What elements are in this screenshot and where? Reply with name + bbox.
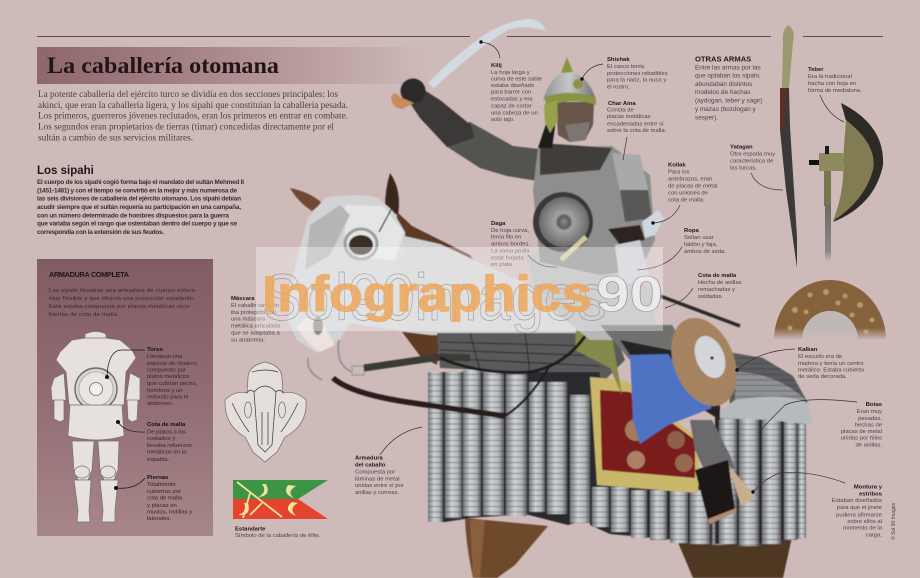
label: Ropa xyxy=(684,228,726,255)
callout: Cota de malla panel xyxy=(116,420,192,463)
text: Los sipahi body: (1451-1481) y con el tiempo se convirtió en la mejor y más numerosa de xyxy=(37,187,237,194)
callout lines xyxy=(380,42,857,492)
label: Kilij: La hoja larga y xyxy=(491,70,530,76)
label: Cota de malla: Hecha de anillas xyxy=(698,280,742,286)
label: Kilij: capaz de cortar xyxy=(491,104,532,110)
callout: Piernas: muslos, rodillas y xyxy=(147,510,192,516)
callout: Piernas: cota de malla xyxy=(147,496,183,502)
text: Los sipahi body: correspondía con la extensión de sus feudos. xyxy=(37,229,164,236)
rider head and helmet xyxy=(538,57,596,148)
label: Montura y estribos: carga. xyxy=(866,532,882,538)
heading: Los sipahi: Los sipahi xyxy=(37,165,94,177)
illustration: full armour figure xyxy=(51,332,140,522)
panel paragraph: Esta estaba compuesta por placas metálicas recu- xyxy=(49,304,191,310)
label: Shishak: para la nariz, la nuca y xyxy=(607,78,666,84)
label: Kilij: curva de este sable xyxy=(491,76,543,82)
label: Botas: de anillas. xyxy=(855,443,882,449)
watermark: Sol90images xyxy=(262,260,607,334)
label: Daga xyxy=(491,221,530,268)
label: Montura y estribos: pudiera afirmarse xyxy=(836,512,883,518)
label: Estandarte: Símbolo de la caballería de élite. xyxy=(235,533,321,539)
label: Montura y estribos xyxy=(832,484,883,538)
label: Kollak: de placas de metal xyxy=(668,183,717,189)
callout: Piernas: cubiertas por xyxy=(147,489,181,495)
blue cloth xyxy=(630,354,712,444)
label: Kalkan: Kalkan xyxy=(798,347,818,353)
label: Armadura del caballo xyxy=(355,456,404,496)
label: Máscara: que se adaptaba a xyxy=(231,331,281,337)
callout: Torso xyxy=(105,347,198,407)
label: Máscara xyxy=(231,296,281,343)
watermark: 90 xyxy=(596,266,663,322)
label: Daga: De hoja curva, xyxy=(491,228,529,234)
label: Char Aina: Char Aina xyxy=(608,101,636,107)
rider torso xyxy=(533,143,664,285)
label: Máscara: su anatomía. xyxy=(231,337,265,343)
title banner: La caballería otomana xyxy=(47,53,280,78)
title banner xyxy=(37,47,430,84)
label: Máscara: metálica articulada xyxy=(231,323,281,329)
callout: Torso: compuesto por xyxy=(147,368,186,374)
rider leg and boot xyxy=(690,420,736,524)
label: Cota de malla: soldadas. xyxy=(698,294,724,300)
label: Botas: Botas xyxy=(866,402,883,408)
label: Yatagan: Yatagan xyxy=(730,145,753,151)
callout: Torso: Llevaban una xyxy=(147,354,183,360)
label: Ropa: faldón y faja, xyxy=(684,242,718,248)
text: Los sipahi body: que variaba según el rango que ostentaban dentro del cuerpo y que se xyxy=(37,221,237,228)
callout dots xyxy=(479,40,755,494)
callout: Piernas: Piernas xyxy=(147,475,169,481)
callout: Piernas: laterales. xyxy=(147,516,171,522)
label: Montura y estribos: Montura y xyxy=(854,484,883,490)
flag: estandarte xyxy=(233,480,328,519)
label: Char Aina: sobre la cota de malla. xyxy=(607,128,667,134)
yatagan sword xyxy=(780,25,797,268)
label: Kilij: solo tajo. xyxy=(491,117,515,123)
block: Otras armas: abundaban distintos xyxy=(695,81,752,88)
intro paragraph: akinci, que eran la caballería ligera, y los sipahi que constituían la caballería pesada. xyxy=(38,100,348,111)
block: Otras armas: modelos de hachas xyxy=(695,89,750,96)
callout: Piernas: Totalmente xyxy=(147,482,177,488)
callout: Torso: hombros y un xyxy=(147,388,183,394)
callout: Cota de malla panel: llevaba refuerzos xyxy=(147,443,192,449)
label: Montura y estribos: para que el jinete xyxy=(837,505,883,511)
label: Botas: placas de metal xyxy=(841,429,882,435)
callout: Torso: que cubrían pecho, xyxy=(147,381,198,387)
callout: Torso: especie de chaleco xyxy=(147,361,198,367)
callout: Cota de malla panel: costados y xyxy=(147,436,175,442)
label: Char Aina: encadenadas entre sí xyxy=(607,121,664,127)
label: Armadura del caballo: láminas de metal xyxy=(355,476,400,482)
label: Kilij: una cabeza de un xyxy=(491,110,538,116)
label: Teber: Teber xyxy=(808,67,824,73)
horse neck armour xyxy=(392,236,602,338)
callout: Torso: abdomen. xyxy=(147,401,174,407)
horse rump cape xyxy=(716,352,813,425)
shield kalkan xyxy=(659,308,749,416)
label: Kollak: Para los xyxy=(668,169,690,175)
block: Otras armas: y mazas (bozdogan y xyxy=(695,106,757,113)
credit: © Sol 90 Images xyxy=(890,502,897,540)
label: Kalkan xyxy=(798,347,865,380)
label: Kilij: estocadas y era xyxy=(491,97,533,103)
label: Yatagan: Otra espada muy xyxy=(730,152,775,158)
label: Máscara: una máscara xyxy=(231,317,266,323)
block: Otras armas xyxy=(695,54,762,122)
label: Montura y estribos: Estaban diseñados xyxy=(832,498,882,504)
label: Char Aina xyxy=(607,101,667,134)
callout: Piernas xyxy=(114,475,192,522)
text: Los sipahi body: con un número determinado de hombres dispuestos para la guerra xyxy=(37,212,229,219)
label: Kalkan: El escudo era de xyxy=(798,354,843,360)
label: Kollak: antebrazos, eran xyxy=(668,176,712,182)
label: Montura y estribos: momento de la xyxy=(843,526,883,532)
callout: Cota de malla panel: De platos a los xyxy=(147,430,186,436)
callout: Torso: Torso xyxy=(147,347,163,353)
text: Los sipahi body: acudir siempre que el sultán requería su participación en una campaña, xyxy=(37,204,241,211)
saddle cloth xyxy=(590,377,700,493)
label: Kalkan: madera y tenía un centro xyxy=(798,361,864,367)
sword: kilij xyxy=(428,19,546,88)
callout: Piernas: y placas en xyxy=(147,503,177,509)
callout: Torso: platos metálicos xyxy=(147,374,189,380)
panel heading: ARMADURA COMPLETA xyxy=(49,270,130,279)
label: Máscara: El caballo también xyxy=(231,303,279,309)
saddle front xyxy=(575,325,622,395)
label: Char Aina: placas metálicas xyxy=(607,114,651,120)
label: Cota de malla: remachadas y xyxy=(698,287,735,293)
label: Teber: hacha con hoja en xyxy=(808,81,856,87)
label: Armadura del caballo: del caballo xyxy=(355,462,386,468)
shield detail xyxy=(774,280,886,340)
panel paragraph: Los sipahi llevaban una armadura de cuerpo entero xyxy=(49,288,196,294)
label: Kollak: con uniones de xyxy=(668,190,709,196)
label: Kilij xyxy=(491,63,543,123)
text: Los sipahi body: El cuerpo de los sipahi cogió forma bajo el mandato del sultán Mehmed II xyxy=(37,179,244,186)
label: Montura y estribos: estribos xyxy=(859,491,883,497)
label: Shishak xyxy=(607,57,668,91)
block: Otras armas: Entre las armas por las xyxy=(695,64,761,72)
block: Otras armas: que optaban los sipahi, xyxy=(695,72,761,80)
label: Daga: Daga xyxy=(491,221,506,227)
horse body armour: left section xyxy=(425,368,600,526)
panel paragraph: biertas de cota de malla. xyxy=(49,312,119,318)
axe teber xyxy=(809,103,883,262)
label: Montura y estribos: sobre ellos al xyxy=(847,519,882,525)
label: Teber: forma de medialuna. xyxy=(808,88,862,94)
label: Botas: hechas de xyxy=(855,422,883,428)
label: Char Aina: Consta de xyxy=(607,107,635,113)
label: Kilij: para barrer con xyxy=(491,90,531,96)
block: Otras armas: (aydogan, teber y sagir) xyxy=(695,98,762,104)
label: Ropa: Solían usar xyxy=(684,235,714,241)
label: Armadura del caballo: unidas entre sí por xyxy=(355,483,404,489)
intro paragraph: Los segundos eran propietarios de tierras (timar) concedidas directamente por el xyxy=(38,122,334,132)
horse body armour: lower section xyxy=(590,485,730,546)
label: Shishak: Shishak xyxy=(607,57,630,63)
bridle and straps xyxy=(308,208,592,416)
label: Máscara: Máscara xyxy=(231,296,255,302)
intro paragraph xyxy=(38,89,348,144)
watermark: Infographics xyxy=(262,266,592,322)
label: Máscara: iba protegido con xyxy=(231,310,276,316)
label: Yatagan: característica de xyxy=(730,159,774,165)
intro paragraph: Los primeros, guerreros jóvenes reclutados, eran los primeros en entrar en combate. xyxy=(38,110,348,122)
label: Estandarte xyxy=(235,526,321,539)
label: Teber xyxy=(808,67,862,94)
callout: Cota de malla panel: espalda. xyxy=(147,457,170,463)
label: Yatagan: las turcas. xyxy=(730,166,757,172)
label: Armadura del caballo: Compuesta por xyxy=(355,469,395,475)
callout: Cota de malla panel: Cota de malla xyxy=(147,422,186,428)
label: Cota de malla: Cota de malla xyxy=(698,273,737,279)
label: Kollak xyxy=(668,162,717,203)
label: Kilij: Kilij xyxy=(491,63,502,69)
label: Botas: unidas por hilos xyxy=(841,436,882,442)
label: Daga: en plata. xyxy=(491,262,514,268)
scabbard xyxy=(660,296,740,326)
label: Kalkan: metálico. Estaba cubierto xyxy=(798,368,865,374)
illustration: horse mask xyxy=(225,362,306,462)
label: Estandarte: Estandarte xyxy=(235,526,266,532)
label: Ropa: ambos de seda. xyxy=(684,249,726,255)
rider left arm xyxy=(391,78,556,184)
label: Shishak: el rostro. xyxy=(607,85,630,91)
label: Botas xyxy=(841,402,883,449)
panel: armadura completa xyxy=(37,259,213,536)
label: Armadura del caballo: anillas y correas. xyxy=(355,490,400,496)
panel paragraph: muy flexible y que ofrecía una protección excelente. xyxy=(49,296,195,302)
label: Kilij: estaba diseñado xyxy=(491,83,535,89)
label: Daga: La vaina podía xyxy=(491,249,530,255)
label: Kollak: cota de malla. xyxy=(668,197,705,203)
horse mane and brown chest xyxy=(397,212,480,365)
horse body armour: rear section xyxy=(715,415,807,546)
label: Botas: pesadas, xyxy=(858,416,882,422)
label: Teber: Era la tradicional xyxy=(808,74,852,80)
text: Los sipahi body xyxy=(37,179,244,236)
block: Otras armas: sesper). xyxy=(695,114,718,122)
horse and rider illustration xyxy=(288,19,813,578)
label: Daga: estar forjada xyxy=(491,255,524,261)
callout: Torso: redondo para el xyxy=(147,394,188,400)
horse legs xyxy=(465,518,792,578)
horse chest plates xyxy=(437,333,625,385)
horse head mask xyxy=(288,173,405,353)
text: Los sipahi body: las seis divisiones de caballería del ejército otomano. Los sipahi debían xyxy=(37,196,241,203)
callout: Cota de malla panel: metálicos en la xyxy=(147,450,187,456)
top rule lines xyxy=(37,36,883,38)
label: Ropa: Ropa xyxy=(684,228,699,234)
label: Shishak: El casco tenía xyxy=(607,64,645,70)
label: Shishak: protecciones rebatibles xyxy=(607,71,668,77)
block: Otras armas: OTRAS ARMAS xyxy=(695,54,751,64)
label: Kalkan: de seda decorada. xyxy=(798,374,847,380)
label: Kollak: Kollak xyxy=(668,162,686,168)
label: Armadura del caballo: Armadura xyxy=(355,456,384,462)
panel paragraph xyxy=(49,288,196,318)
label: Yatagan xyxy=(730,145,775,172)
label: Botas: Eran muy xyxy=(857,409,882,415)
rider legs and skirt xyxy=(525,245,720,420)
stirrup xyxy=(729,466,756,506)
intro paragraph: La potente caballería del ejército turco se dividía en dos secciones principales: los xyxy=(38,89,338,100)
label: Cota de malla xyxy=(698,273,742,300)
intro paragraph: sultán a cambio de sus servicios militares. xyxy=(38,132,193,144)
label: Daga: ambos bordes. xyxy=(491,241,530,247)
label: Daga: tenía filo en xyxy=(491,235,521,241)
